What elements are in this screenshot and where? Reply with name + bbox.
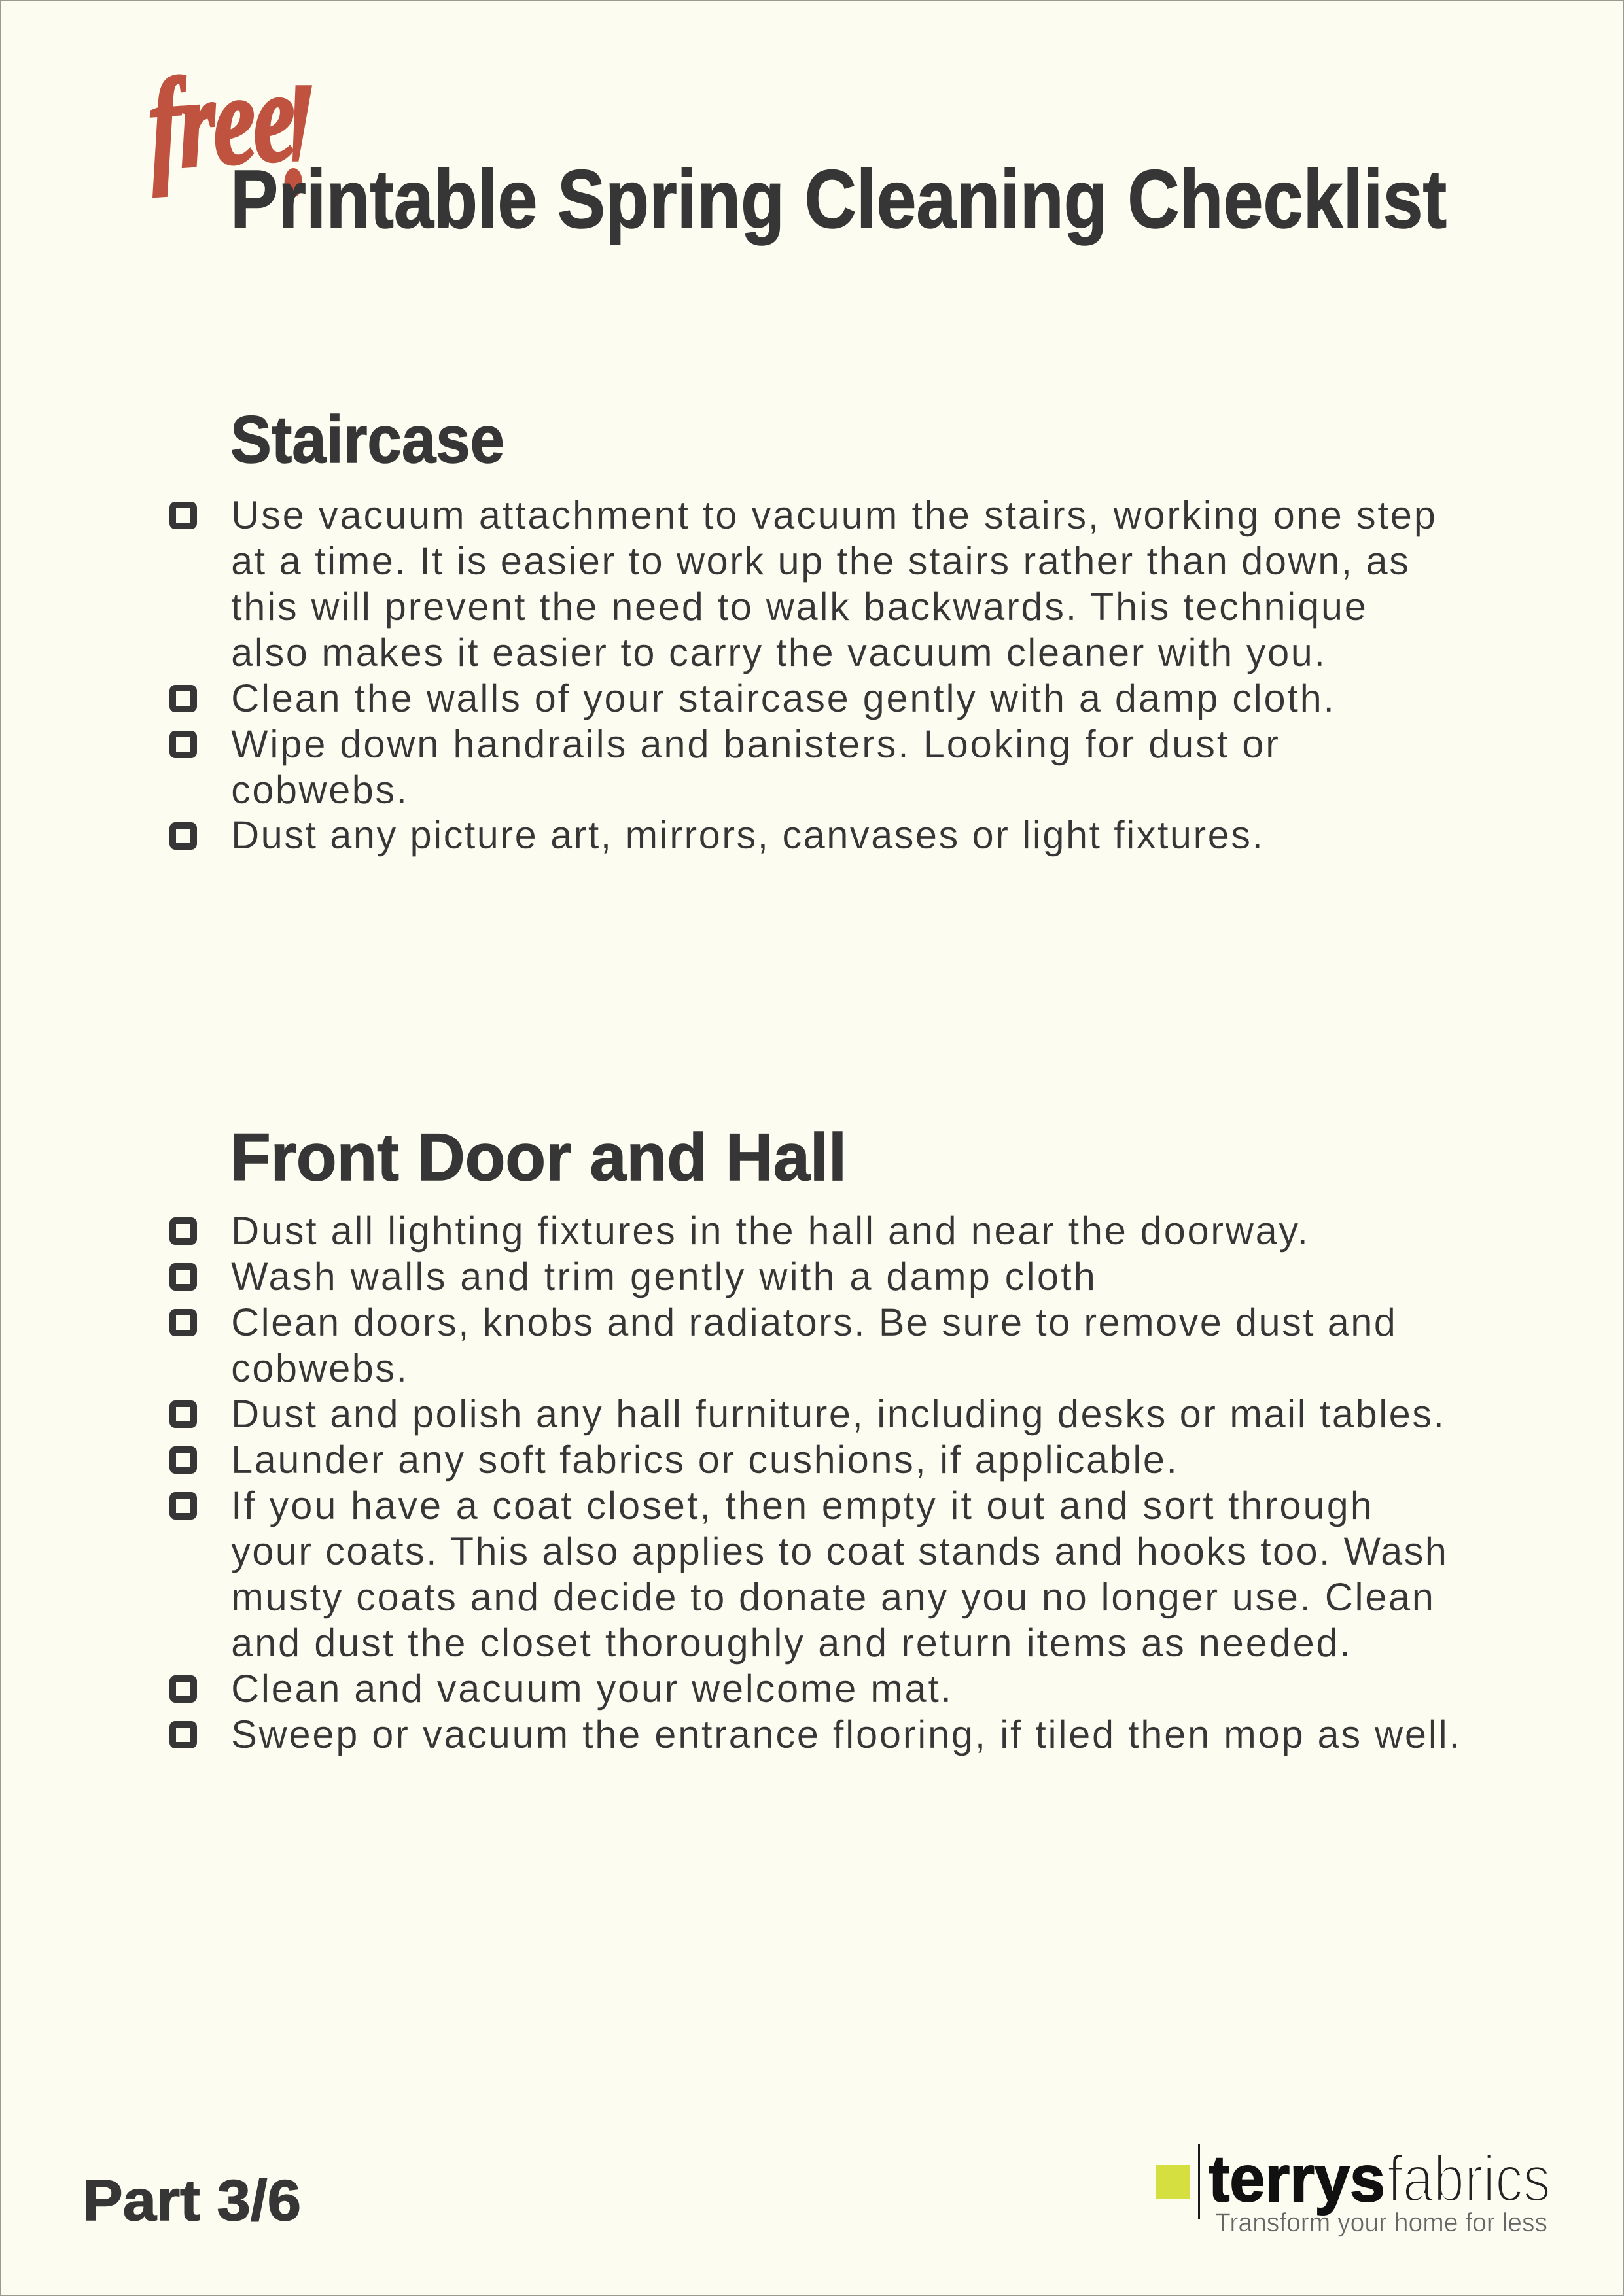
checklist: staircase bbox=[173, 493, 1436, 857]
logo green square bbox=[1156, 2165, 1190, 2199]
checklist: front door and hall: musty coats and decide to donate any you no longer use. Clean bbox=[231, 1575, 1434, 1619]
logo wordmark: terrys bbox=[1209, 2142, 1385, 2216]
heading: front door and hall: Front Door and Hall bbox=[230, 1120, 847, 1194]
logo: terrys fabrics bbox=[1156, 2142, 1551, 2237]
checklist: front door and hall: Launder any soft fabrics or cushions, if applicable. bbox=[231, 1438, 1177, 1482]
logo wordmark bbox=[1209, 2142, 1551, 2216]
free lettering: free bbox=[144, 44, 298, 197]
checklist: staircase: Clean the walls of your staircase gently with a damp cloth. bbox=[231, 676, 1334, 720]
logo tagline: Transform your home for less bbox=[1215, 2208, 1547, 2237]
free lettering: ! bbox=[277, 48, 317, 229]
checklist: front door and hall: your coats. This also applies to coat stands and hooks too. Wash bbox=[231, 1529, 1447, 1573]
checklist: front door and hall bbox=[173, 1209, 1460, 1756]
checklist: front door and hall: Clean and vacuum your welcome mat. bbox=[231, 1667, 951, 1711]
checklist: front door and hall: Dust and polish any hall furniture, including desks or mail tables. bbox=[231, 1392, 1444, 1436]
checklist: staircase: Use vacuum attachment to vacuum the stairs, working one step bbox=[231, 493, 1436, 537]
checklist: front door and hall: Wash walls and trim gently with a damp cloth bbox=[231, 1255, 1095, 1298]
checklist: front door and hall: Dust all lighting fixtures in the hall and near the doorway. bbox=[231, 1209, 1308, 1253]
checklist: staircase: also makes it easier to carry the vacuum cleaner with you. bbox=[231, 631, 1325, 674]
checklist: front door and hall: cobwebs. bbox=[231, 1346, 407, 1390]
checklist: staircase: this will prevent the need to walk backwards. This technique bbox=[231, 585, 1366, 629]
section: front door and hall bbox=[173, 1120, 1460, 1756]
checklist: front door and hall: Sweep or vacuum the entrance flooring, if tiled then mop as well. bbox=[231, 1713, 1460, 1756]
checklist: front door and hall: and dust the closet thoroughly and return items as needed. bbox=[231, 1621, 1350, 1665]
free exclamation dot bbox=[286, 171, 300, 188]
section: staircase bbox=[173, 402, 1436, 857]
checklist: front door and hall: Clean doors, knobs and radiators. Be sure to remove dust and bbox=[231, 1300, 1396, 1344]
checklist: staircase: Wipe down handrails and banisters. Looking for dust or bbox=[231, 722, 1279, 766]
logo divider bbox=[1198, 2144, 1200, 2219]
checklist: staircase: at a time. It is easier to work up the stairs rather than down, as bbox=[231, 539, 1409, 583]
checklist: front door and hall: If you have a coat closet, then empty it out and sort through bbox=[231, 1484, 1372, 1527]
heading: staircase: Staircase bbox=[230, 402, 504, 477]
logo wordmark: fabrics bbox=[1387, 2142, 1551, 2216]
title: Printable Spring Cleaning Checklist bbox=[230, 153, 1447, 245]
checklist: staircase: Dust any picture art, mirrors, canvases or light fixtures. bbox=[231, 813, 1263, 857]
checklist: staircase: cobwebs. bbox=[231, 768, 407, 812]
part number: Part 3/6 bbox=[82, 2168, 301, 2233]
